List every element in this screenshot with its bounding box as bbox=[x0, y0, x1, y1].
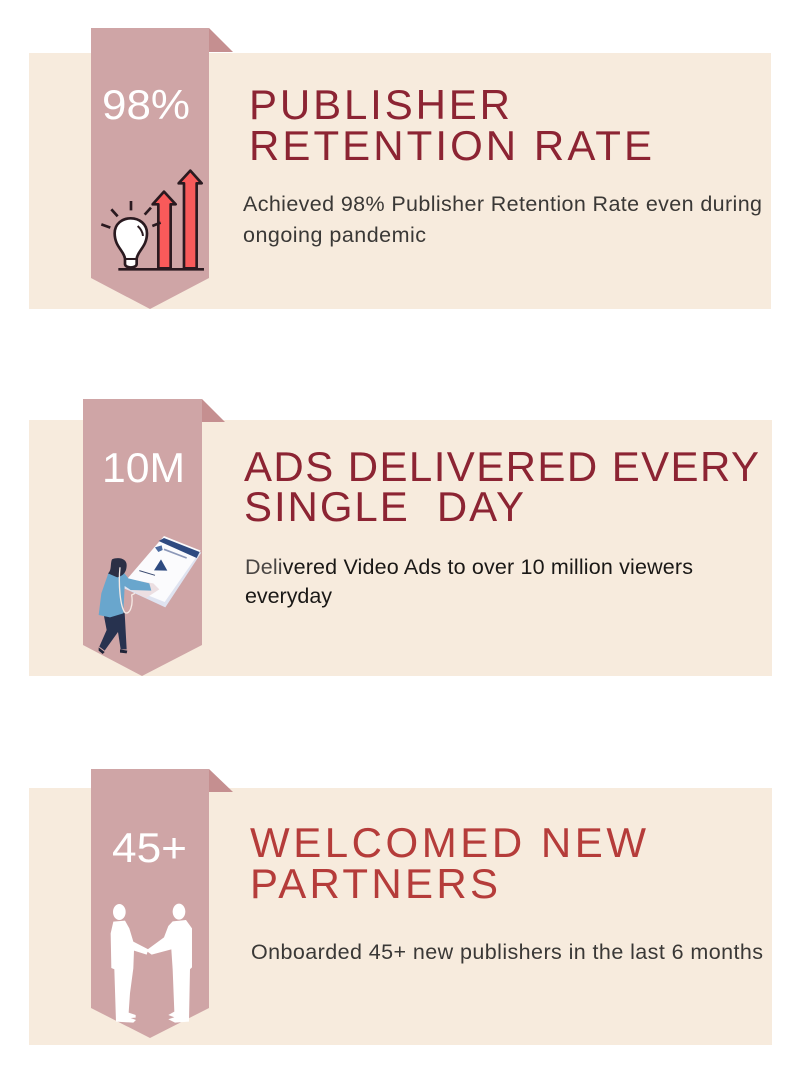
stat: 98%: 98% bbox=[102, 81, 190, 128]
heading: welcomed new partners bbox=[250, 819, 646, 907]
stat: 45+: 45+ bbox=[112, 824, 187, 871]
text: ads description bbox=[245, 555, 693, 608]
icon: light bulb and rising arrows bbox=[101, 171, 204, 269]
text: retention description: ongoing pandemic bbox=[243, 223, 426, 247]
text: ads description: Delivered Video Ads to over 10 million viewers bbox=[245, 555, 693, 579]
heading: publisher retention rate: RETENTION RATE bbox=[249, 122, 652, 169]
ribbon: 45+ bbox=[91, 769, 233, 1038]
heading: ads delivered every single day bbox=[244, 443, 759, 530]
stat: 10M: 10M bbox=[102, 444, 185, 491]
text: retention description bbox=[243, 192, 762, 247]
heading: ads delivered every single day: SINGLE DAY bbox=[244, 483, 524, 530]
heading: welcomed new partners: PARTNERS bbox=[250, 860, 498, 907]
panel: welcomed new partners bbox=[29, 769, 772, 1045]
ribbon: 98% bbox=[91, 28, 233, 309]
panel: publisher retention rate bbox=[29, 28, 771, 309]
icon: handshake silhouette bbox=[111, 904, 192, 1023]
panel: ads delivered every single day bbox=[29, 399, 772, 676]
heading: publisher retention rate: PUBLISHER bbox=[249, 81, 510, 128]
heading: welcomed new partners: WELCOMED NEW bbox=[250, 819, 646, 866]
icon: woman with phone playing video bbox=[99, 536, 201, 654]
text: ads description: everyday bbox=[245, 584, 332, 608]
text: partners description: Onboarded 45+ new publishers in the last 6 months bbox=[251, 940, 763, 964]
heading: ads delivered every single day: ADS DELIVERED EVERY bbox=[244, 443, 759, 490]
heading: publisher retention rate bbox=[249, 81, 652, 169]
text: retention description: Achieved 98% Publisher Retention Rate even during bbox=[243, 192, 762, 216]
ribbon: 10M bbox=[83, 399, 225, 676]
